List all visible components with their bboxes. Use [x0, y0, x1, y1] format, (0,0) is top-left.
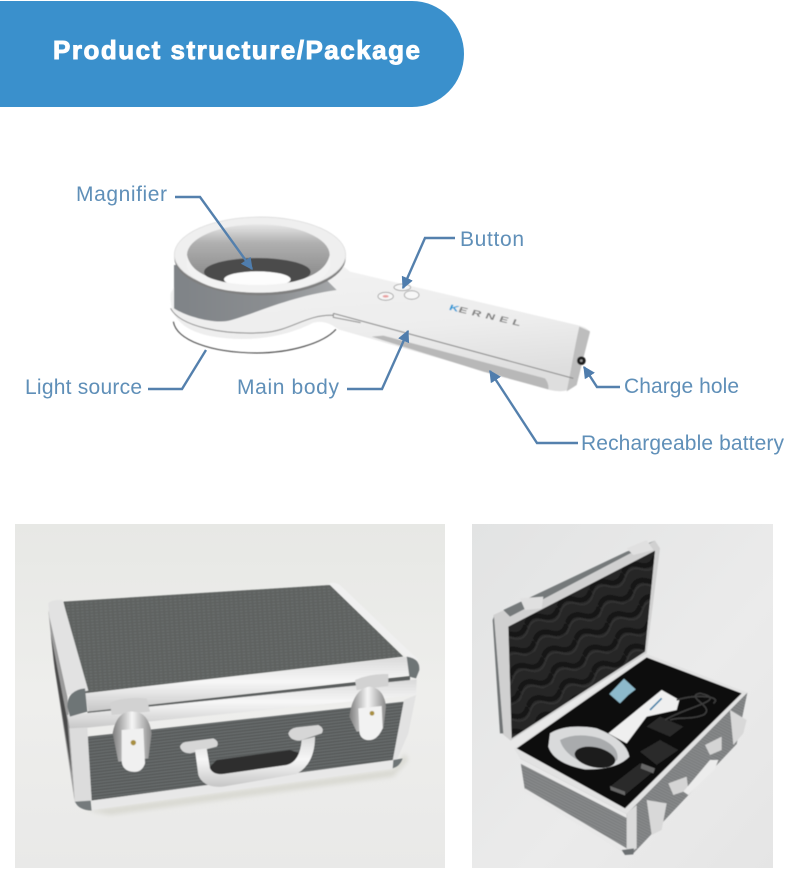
- callout: Magnifier: Magnifier: [76, 183, 167, 206]
- grey band: [174, 265, 337, 322]
- callout: Charge hole: [584, 367, 739, 398]
- light source arc: [173, 322, 336, 353]
- photo panel: closed case: [15, 524, 445, 868]
- tray foam: [517, 657, 742, 808]
- left front face: [520, 758, 627, 854]
- callout: Magnifier: [76, 183, 252, 269]
- closed aluminium case: [48, 583, 419, 815]
- lid frame: [493, 541, 660, 741]
- callout: Main body: [237, 331, 408, 399]
- buttons: [378, 284, 419, 300]
- left side: [48, 610, 75, 803]
- latches and handle: [647, 710, 747, 835]
- right latch: [349, 674, 388, 740]
- callout: Main body: Main body: [237, 376, 340, 399]
- seam lines: [171, 308, 573, 378]
- tray compartments: [610, 717, 683, 795]
- end cap: [567, 327, 590, 391]
- lid hinges: [520, 540, 653, 610]
- callout: Button: [403, 228, 524, 288]
- brand logo: K: [447, 303, 460, 314]
- callout: Button: Button: [460, 228, 524, 251]
- lid top: [63, 585, 403, 693]
- callout: Light source: [25, 350, 206, 399]
- charge hole: [577, 356, 586, 365]
- header banner: [0, 1, 464, 107]
- corner caps: [67, 688, 87, 717]
- right front face: [627, 693, 747, 854]
- ground shadow: [87, 753, 408, 815]
- rechargeable battery strip: [372, 336, 548, 389]
- open aluminium case: [493, 540, 747, 855]
- handle: [180, 725, 323, 787]
- base rim: [514, 654, 747, 814]
- lid foam: [508, 551, 655, 738]
- lid rails: [48, 600, 88, 695]
- title: Product structure/Package: [53, 35, 420, 65]
- callout: Charge hole: Charge hole: [624, 375, 739, 398]
- front frame: [69, 727, 92, 803]
- eyecup: [174, 217, 346, 295]
- photo panel: open case: [472, 524, 773, 868]
- callout: Rechargeable battery: Rechargeable battery: [581, 432, 784, 455]
- left latch: [110, 698, 152, 772]
- cable: [665, 693, 716, 720]
- brand logo: ERNEL: [457, 306, 522, 328]
- callout: Rechargeable battery: [490, 371, 784, 455]
- blue cloth: [609, 679, 636, 703]
- main body: [171, 263, 590, 391]
- middle rail: [67, 679, 417, 729]
- product device illustration: [171, 217, 590, 391]
- callout: Light source: Light source: [25, 376, 142, 399]
- device in tray: [548, 690, 679, 771]
- front face: [87, 702, 404, 801]
- lid lower dark strip: [87, 676, 410, 718]
